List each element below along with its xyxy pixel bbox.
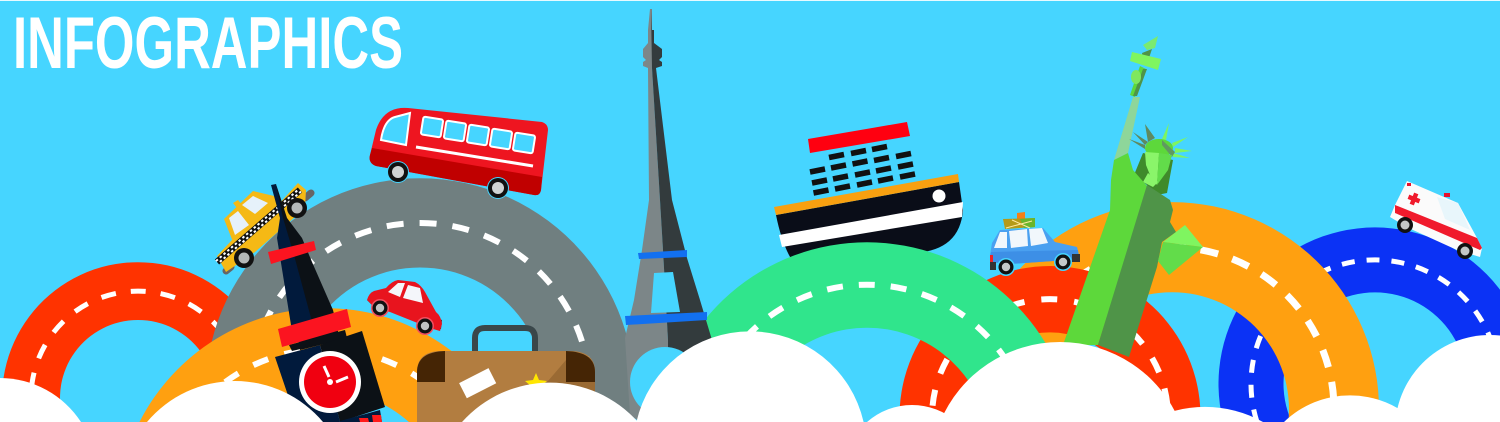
road: red right arc — [900, 266, 1200, 422]
red car — [367, 280, 442, 335]
road: orange right arc — [965, 202, 1379, 422]
bus — [370, 108, 548, 199]
Eiffel tower — [625, 9, 712, 422]
road: red left arc — [2, 262, 274, 422]
road: blue arc — [1218, 227, 1500, 422]
clock face — [299, 351, 361, 413]
title: INFOGRAPHICS — [13, 3, 403, 84]
road: green arc — [660, 242, 1074, 422]
Statue of Liberty — [1063, 36, 1203, 357]
taxi — [216, 183, 311, 272]
clouds — [0, 331, 1500, 422]
road: grey arc — [206, 178, 634, 422]
ambulance — [1390, 181, 1482, 259]
suitcase — [417, 328, 595, 422]
Big Ben tower — [268, 184, 385, 422]
road: orange left arc — [140, 308, 510, 422]
ship — [774, 122, 963, 262]
blue wagon car with luggage — [990, 212, 1080, 276]
